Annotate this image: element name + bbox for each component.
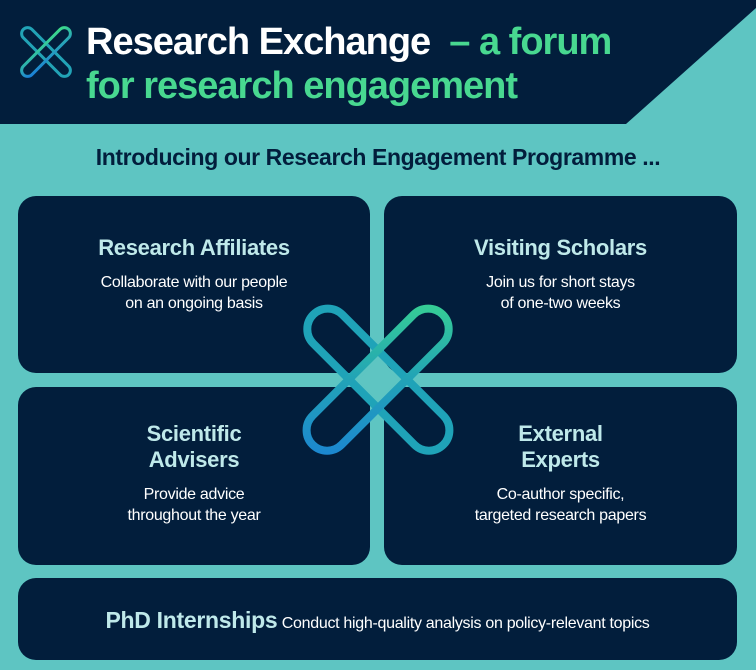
text: on an ongoing basis [125,295,263,312]
text: of one-two weeks [501,295,620,312]
text [486,274,635,312]
text: Co-author specific, [497,486,624,503]
heading: External [518,421,603,446]
title: for research engagement [86,65,517,107]
text: throughout the year [127,507,261,524]
text: Collaborate with our people [101,274,287,291]
heading: Research Affiliates [98,235,290,260]
title [86,21,611,107]
panel: external experts [384,387,737,565]
panel: scientific advisers [18,387,370,565]
heading: Advisers [149,447,239,472]
panel: research affiliates [18,196,370,373]
text [475,486,646,524]
panel: phd internships: PhD Internships Conduct high-quality analysis on policy-relevant topics [105,607,650,633]
panel: visiting scholars [384,196,737,373]
title: Research Exchange – a forum [86,21,611,63]
icon: logo [20,26,72,78]
heading [147,421,242,472]
panel: phd internships [18,578,737,660]
text: Provide advice [144,486,244,503]
heading: Visiting Scholars [474,235,647,260]
text: Join us for short stays [486,274,635,291]
text [101,274,287,312]
text [127,486,261,524]
heading [518,421,603,472]
text: targeted research papers [475,507,646,524]
heading: Scientific [147,421,241,446]
subtitle: Introducing our Research Engagement Programme ... [96,144,660,170]
heading: Experts [521,447,600,472]
header banner [0,0,756,124]
